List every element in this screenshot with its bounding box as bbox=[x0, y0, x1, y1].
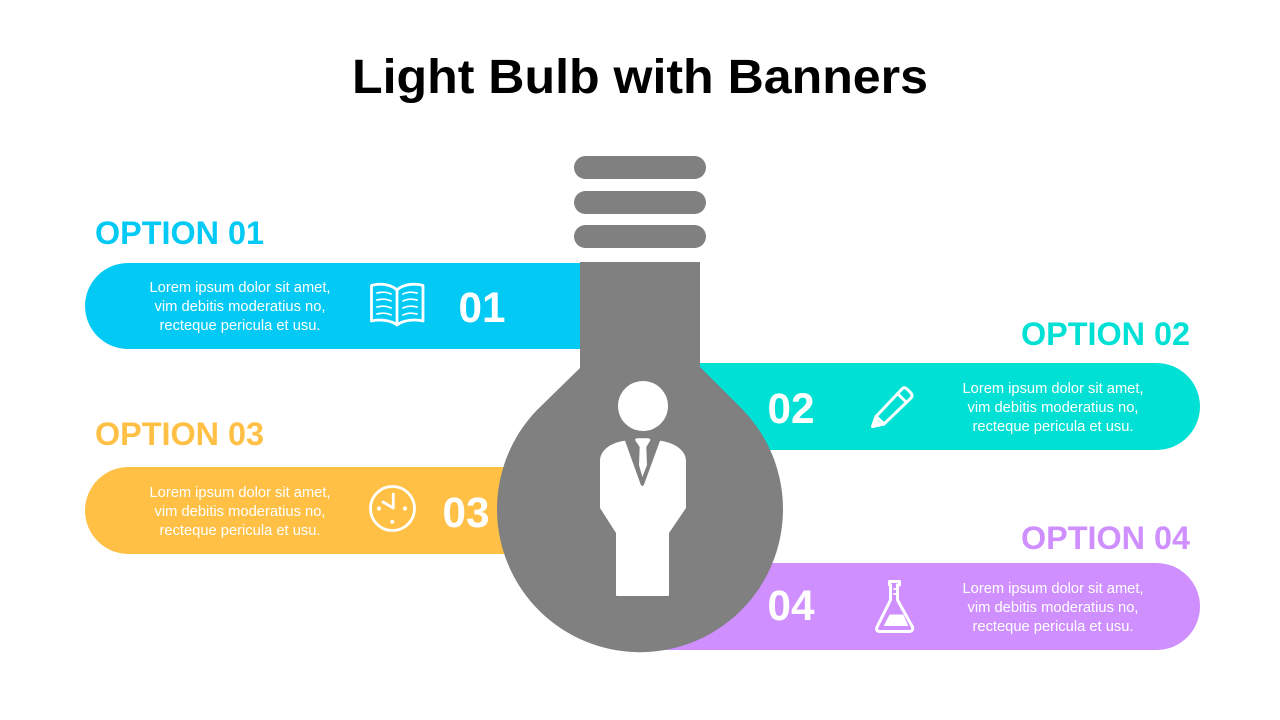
icon: flask bbox=[877, 582, 913, 632]
panel: option 02 bbox=[690, 316, 1200, 450]
banner: option 01 bbox=[85, 263, 600, 349]
text block: option 01: vim debitis moderatius no, bbox=[154, 299, 326, 315]
panel: option 04 bbox=[660, 520, 1200, 650]
text block: option 01: recteque pericula et usu. bbox=[160, 318, 320, 334]
icon: pencil bbox=[872, 388, 912, 426]
text block: option 04: recteque pericula et usu. bbox=[972, 619, 1134, 635]
text block: option 02: recteque pericula et usu. bbox=[972, 419, 1134, 435]
panel: option 01 bbox=[85, 215, 600, 349]
heading: option 03: OPTION 03 bbox=[95, 416, 264, 452]
number: 02: 02 bbox=[768, 385, 814, 433]
number: 04: 04 bbox=[768, 582, 815, 630]
text block: option 02: Lorem ipsum dolor sit amet, bbox=[962, 381, 1144, 397]
text block: option 03: recteque pericula et usu. bbox=[160, 523, 320, 539]
banner: option 03 bbox=[85, 467, 540, 554]
title: Light Bulb with Banners bbox=[352, 51, 928, 104]
icon: open book bbox=[372, 284, 423, 325]
banner: option 02 bbox=[690, 363, 1200, 450]
text block: option 04: Lorem ipsum dolor sit amet, bbox=[962, 581, 1144, 597]
heading: option 04: OPTION 04 bbox=[1021, 520, 1190, 556]
number: 03: 03 bbox=[442, 489, 490, 537]
heading: option 02: OPTION 02 bbox=[1021, 316, 1190, 352]
banner: option 04 bbox=[660, 563, 1200, 650]
bulb body bbox=[497, 262, 783, 652]
number: 01: 01 bbox=[458, 284, 506, 332]
text block: option 03: Lorem ipsum dolor sit amet, bbox=[150, 485, 330, 501]
text block: option 01: Lorem ipsum dolor sit amet, bbox=[150, 280, 330, 296]
text block: option 04: vim debitis moderatius no, bbox=[968, 600, 1138, 616]
text block: option 02: vim debitis moderatius no, bbox=[968, 400, 1138, 416]
icon: clock bbox=[370, 486, 414, 530]
light bulb bbox=[497, 156, 783, 652]
text block: option 03: vim debitis moderatius no, bbox=[154, 504, 326, 520]
icon: businessman bbox=[600, 381, 686, 596]
bulb cap stripes bbox=[574, 156, 706, 248]
heading: option 01: OPTION 01 bbox=[95, 215, 264, 251]
panel: option 03 bbox=[85, 416, 540, 554]
